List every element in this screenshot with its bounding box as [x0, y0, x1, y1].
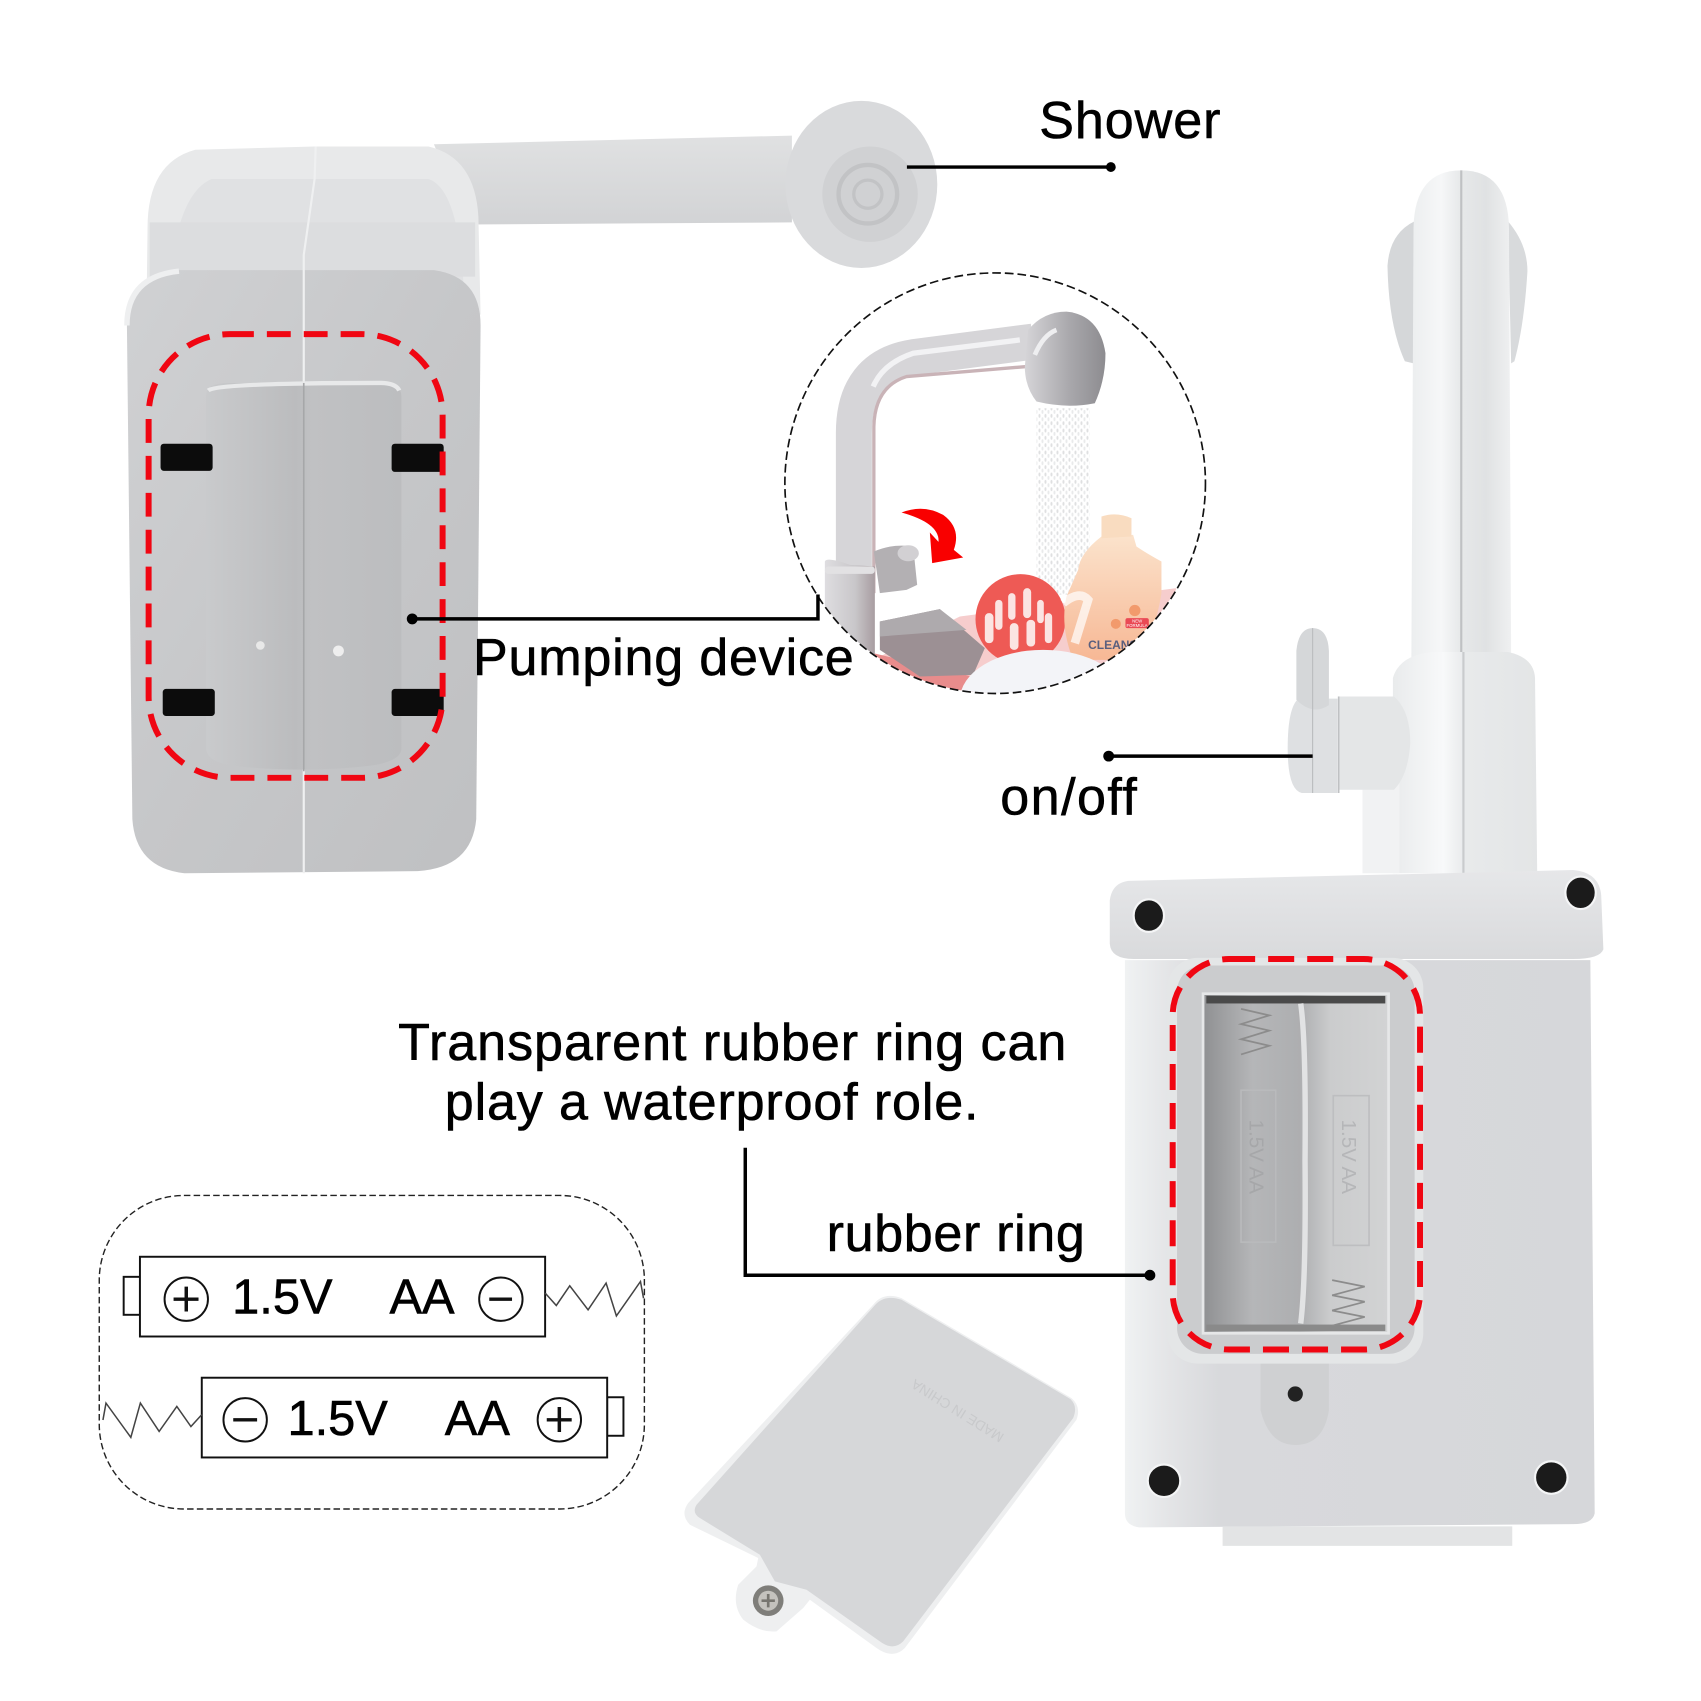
main tube: [1411, 170, 1511, 662]
pump block: [206, 383, 401, 770]
faucet tube: [854, 340, 1033, 593]
right device: faucet standing view: [1110, 170, 1603, 1546]
label: rubber ring: rubber ring: [827, 1205, 1085, 1263]
battery 1: AA: [389, 1271, 455, 1325]
battery cover plate: [684, 1296, 1078, 1654]
main body front: [127, 270, 481, 873]
detergent bottle: NEW: [1132, 619, 1143, 624]
detergent bottle: [1063, 514, 1161, 660]
label: pumping device: Pumping device: [473, 629, 854, 687]
battery 2: 1.5V: [287, 1392, 388, 1446]
screws: [1134, 877, 1596, 1497]
embossed cover text: MADE IN CHINA: [908, 1376, 1006, 1446]
inset: faucet in use: [784, 272, 1206, 694]
battery compartment: [1203, 994, 1389, 1333]
on/off valve: [1288, 628, 1410, 793]
label: on/off: on/off: [1000, 769, 1137, 827]
battery 1: 1.5V: [232, 1271, 333, 1325]
top housing: [146, 146, 481, 315]
brush: [976, 574, 1065, 664]
red rotate arrow: [902, 509, 963, 563]
leader: pumping device: [407, 594, 818, 624]
pink surface: [880, 588, 1176, 700]
battery 2: AA: [445, 1392, 510, 1446]
embossed battery outlines: [1241, 1090, 1276, 1242]
pull tab recess: [1261, 1356, 1329, 1445]
battery 2: [103, 1378, 623, 1457]
left device: pumping unit: [127, 101, 937, 873]
leader: shower: [907, 162, 1116, 172]
battery diagram: [99, 1195, 644, 1509]
water spray: [1036, 408, 1090, 595]
cover screw: [753, 1585, 784, 1616]
battery recess: [1167, 958, 1423, 1364]
callout: waterproof ring line 1: Transparent rubber ring can: [398, 1014, 1066, 1072]
leader: rubber ring: [745, 1148, 1155, 1281]
faucet head: [1025, 312, 1105, 406]
shower head: [785, 101, 937, 268]
valve knob: [874, 545, 919, 593]
top plate: [1110, 870, 1603, 959]
label: shower: Shower: [1039, 92, 1220, 150]
head side lobes: [1387, 221, 1415, 363]
clip slots: [161, 444, 444, 716]
shower arm: [434, 136, 792, 225]
lower housing: [1125, 960, 1595, 1527]
drop pipe: [1363, 772, 1399, 873]
red dashed ring highlight: [1173, 959, 1420, 1350]
detergent bottle: FORMULA: [1127, 623, 1148, 628]
dashed frame: [99, 1195, 644, 1509]
faucet collar: [825, 560, 875, 656]
dashed circle: [785, 273, 1205, 693]
leader: on/off: [1103, 751, 1313, 762]
battery 1: [124, 1257, 644, 1336]
bottle label: [1125, 618, 1149, 628]
red dashed highlight: [149, 334, 443, 778]
foam: [961, 650, 1101, 693]
battery compartment: 1.5V AA: [1245, 1120, 1268, 1194]
battery compartment: 1.5V AA: [1337, 1120, 1360, 1194]
callout: waterproof ring line 2: play a waterproof role.: [445, 1074, 979, 1132]
collar: [1393, 652, 1537, 873]
base plate: [880, 609, 985, 676]
detergent bottle: CLEANS: [1088, 638, 1137, 652]
springs: [1241, 1009, 1269, 1054]
